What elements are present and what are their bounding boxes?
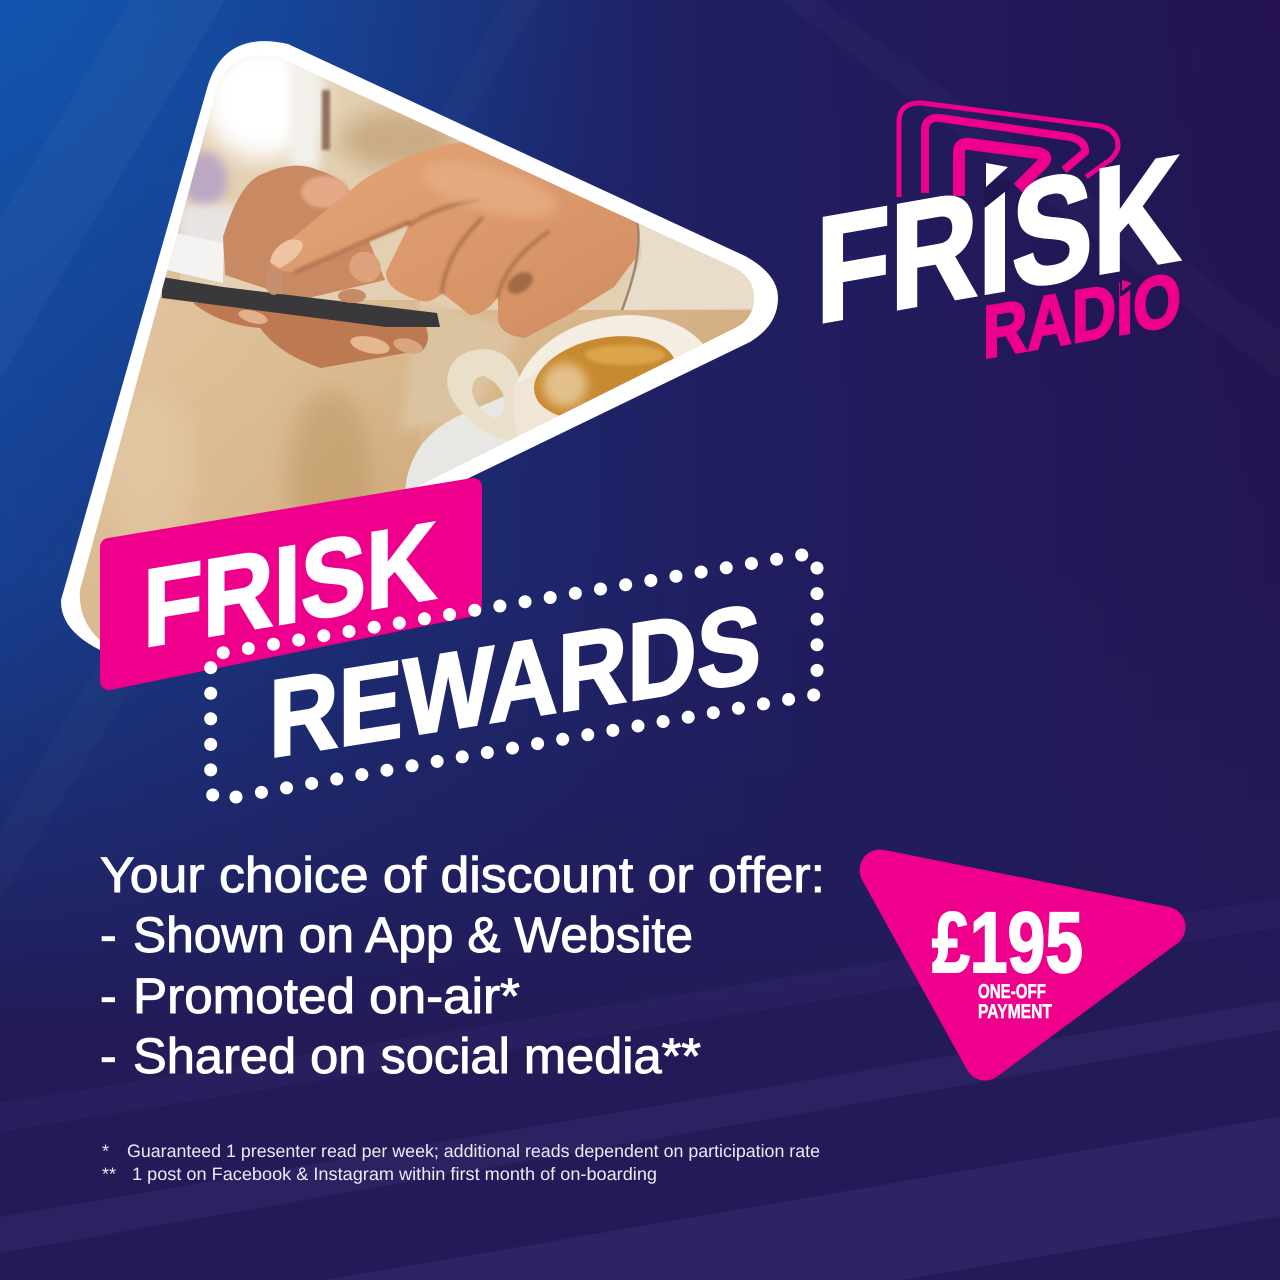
- payment note: PAYMENT: [978, 1001, 1052, 1023]
- logo I-dot triangle: [986, 163, 1008, 187]
- radio wave arcs: [899, 103, 1118, 197]
- cup: [517, 315, 703, 416]
- payment note: [978, 981, 1052, 1023]
- benefits list: -: [100, 968, 117, 1024]
- gap between fingers: [506, 270, 534, 296]
- saucer: [405, 396, 517, 489]
- logo wordmark: FRISK: FRISK: [816, 123, 1181, 355]
- footnotes: 1 post on Facebook & Instagram within first month of on-boarding: [132, 1164, 657, 1184]
- cup handle: [447, 349, 520, 440]
- benefits list: Promoted on-air*: [133, 968, 520, 1024]
- phone screen: [167, 233, 223, 283]
- left hand: [223, 166, 385, 300]
- benefits list: Shared on social media**: [133, 1028, 701, 1084]
- footnotes: **: [102, 1164, 116, 1184]
- payment note: ONE-OFF: [978, 981, 1046, 1003]
- right hand: [270, 142, 639, 338]
- footnotes: *: [102, 1141, 109, 1161]
- logo I top cut: [983, 180, 1011, 208]
- sleeve: [624, 224, 754, 310]
- coffee: [534, 336, 674, 416]
- heading: REWARDS: REWARDS: [269, 581, 761, 782]
- heading: FRISK: FRISK: [143, 499, 437, 671]
- benefits list: -: [100, 907, 117, 963]
- dotted frame: [206, 555, 817, 804]
- benefits list: Your choice of discount or offer:: [100, 847, 825, 903]
- price badge: [880, 870, 1165, 1060]
- photo contents: [80, 56, 754, 640]
- fingernails: [270, 240, 303, 268]
- phone body: [162, 277, 440, 327]
- photo panel: hands using a phone beside a coffee cup: [60, 40, 780, 660]
- logo: Frisk Radio: [816, 103, 1181, 374]
- white rounded triangle frame: [61, 41, 778, 650]
- benefits list: [100, 847, 825, 1084]
- benefits list: -: [100, 1028, 117, 1084]
- logo radio I-dot triangle: [1122, 280, 1132, 291]
- benefits list: Shown on App & Website: [133, 907, 693, 963]
- logo radio I top cut: [1120, 276, 1134, 296]
- footnotes: [102, 1141, 820, 1184]
- price: £195: [932, 895, 1083, 991]
- footnotes: Guaranteed 1 presenter read per week; additional reads dependent on participation rate: [127, 1141, 820, 1161]
- logo wordmark: RADIO: RADIO: [983, 257, 1181, 374]
- finger shadows: [295, 200, 548, 297]
- pink banner with FRISK: [109, 487, 473, 681]
